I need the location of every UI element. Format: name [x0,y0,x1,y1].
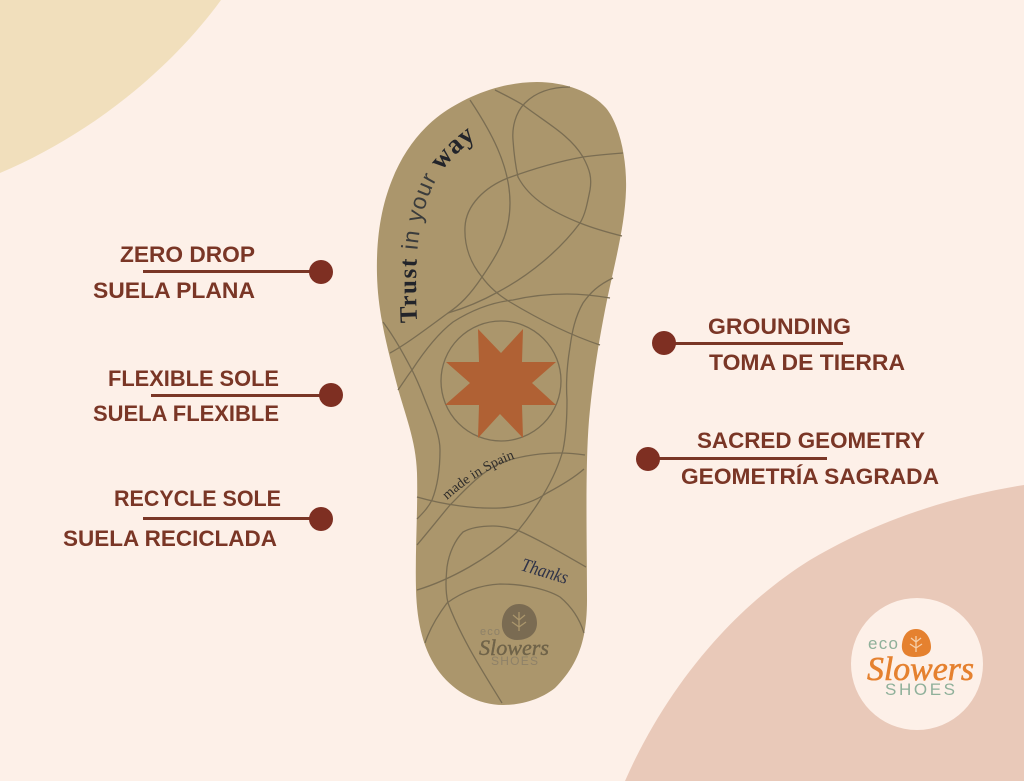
callout: recycle sole: RECYCLE SOLE [114,486,281,511]
logo word SHOES: SHOES [491,654,538,668]
logo blob [502,604,537,640]
star circle [441,321,561,441]
callout: recycle sole: SUELA RECICLADA [63,526,277,551]
callout: zero drop: ZERO DROP [120,242,255,267]
shoe sole [376,82,626,705]
callout: grounding: TOMA DE TIERRA [709,350,905,375]
badge circle [851,598,983,730]
callout: recycle sole [63,486,333,551]
callout: sacred geometry: SACRED GEOMETRY [697,428,925,453]
callout: grounding: GROUNDING [708,314,851,339]
badge word Slowers: Slowers [867,651,974,688]
sole outline [377,82,626,705]
background shape: top-left corner [0,0,221,173]
logo word eco: eco [480,626,500,638]
badge word eco: eco [868,634,898,653]
sole logo [479,604,549,668]
badge blob [902,629,931,657]
brand logo badge [851,598,983,730]
text: Thanks: Thanks [519,555,571,589]
badge word SHOES: SHOES [885,680,955,699]
callout: sacred geometry: GEOMETRÍA SAGRADA [681,464,939,489]
callout: flexible sole: SUELA FLEXIBLE [93,401,279,426]
callout: zero drop [93,242,333,303]
text: made in Spain: made in Spain [443,453,515,500]
callout: flexible sole: FLEXIBLE SOLE [108,366,279,391]
callout: flexible sole [93,366,343,426]
badge leaf icon [910,636,922,652]
callout: zero drop: SUELA PLANA [93,278,255,303]
logo leaf icon [512,612,526,631]
callout: sacred geometry [636,428,939,489]
callout: grounding [652,314,905,375]
star emblem [445,329,556,438]
background shape: bottom-right corner [625,485,1024,781]
sole contour lines [383,87,623,703]
text: Trust in your way: Trust in your way [400,128,472,323]
logo word Slowers: Slowers [479,635,549,660]
